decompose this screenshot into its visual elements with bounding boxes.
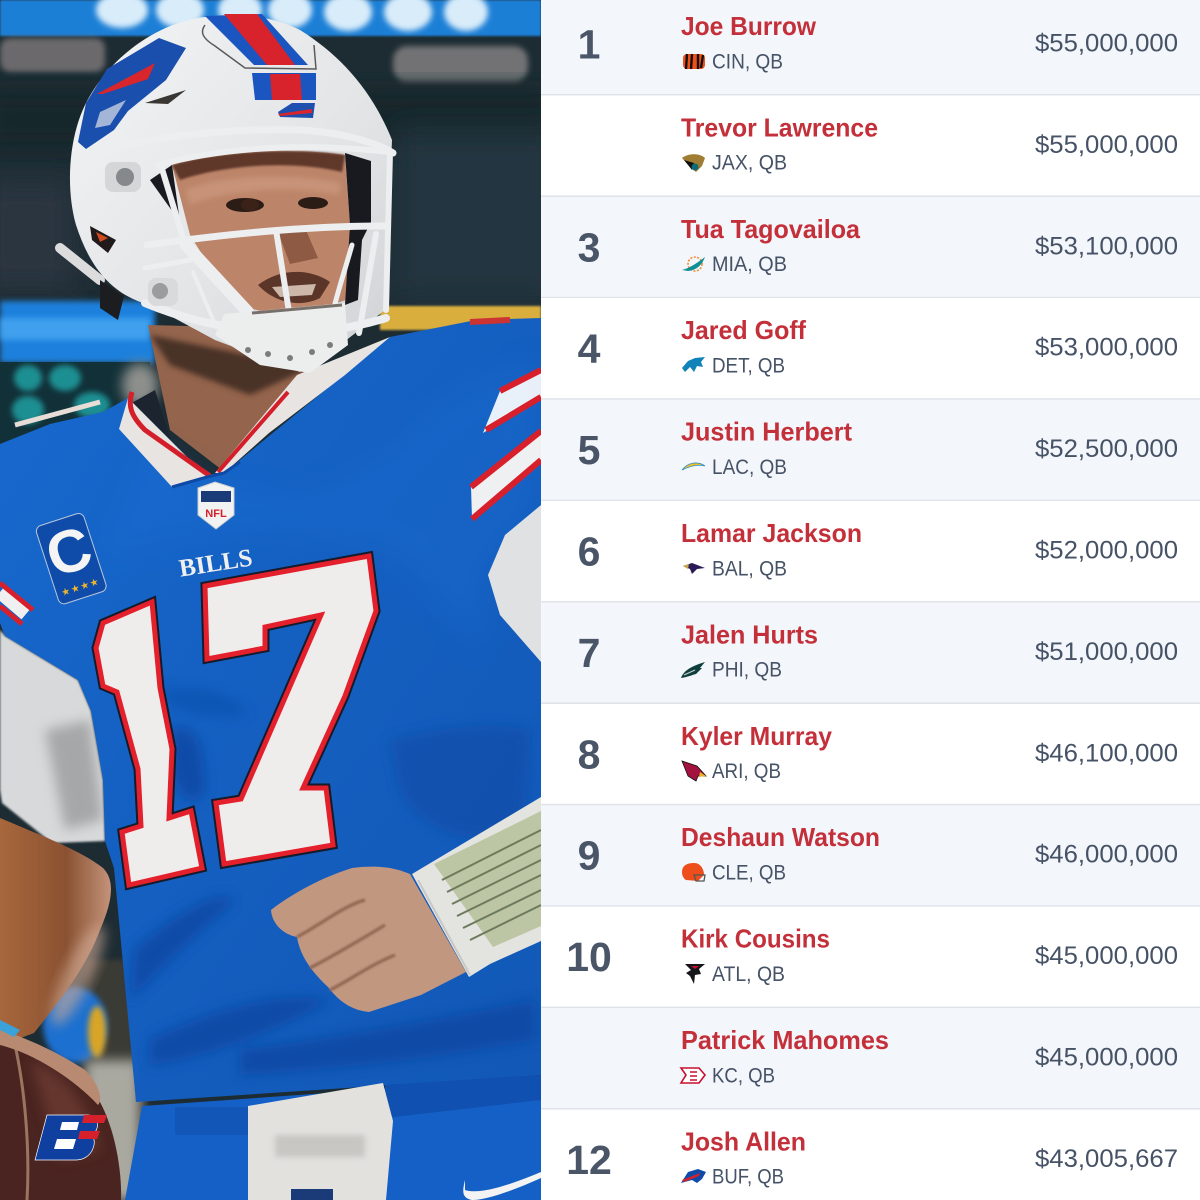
face (150, 151, 371, 318)
row 9: Deshaun Watson: 9 (578, 833, 600, 879)
stadium background (0, 0, 561, 1200)
icon: Lions (682, 357, 705, 372)
helmet clips and vents (60, 90, 186, 320)
pants (125, 1075, 541, 1200)
towel (248, 1083, 393, 1200)
icon: Bills (681, 1169, 706, 1183)
row 7: Jalen Hurts: 7 (578, 630, 600, 676)
icon: Dolphins (682, 257, 705, 271)
row 12: Josh Allen: $43,005,667 (1035, 1145, 1178, 1173)
row 10: Kirk Cousins: 10 (566, 934, 612, 980)
row 6: Lamar Jackson: 6 (578, 528, 600, 574)
row 10: Kirk Cousins (541, 907, 1200, 1008)
row 2: Trevor Lawrence: $55,000,000 (1035, 131, 1178, 159)
row 1: Joe Burrow: Joe Burrow (681, 11, 817, 41)
wrist band (412, 797, 541, 977)
row 6: Lamar Jackson: $52,000,000 (1035, 536, 1178, 564)
row 8: Kyler Murray: $46,100,000 (1035, 739, 1178, 767)
row 5: Justin Herbert: Justin Herbert (681, 417, 852, 447)
row 5: Justin Herbert: $52,500,000 (1035, 435, 1178, 463)
row 1: Joe Burrow: 1 (578, 22, 600, 68)
row 7: Jalen Hurts (541, 603, 1200, 704)
helmet bills logo (78, 38, 315, 149)
row 12: Josh Allen: 12 (566, 1137, 612, 1183)
row 6: Lamar Jackson (541, 501, 1200, 603)
row 3: Tua Tagovailoa: $53,100,000 (1035, 232, 1178, 260)
icon: Chargers (682, 463, 705, 470)
icon: Eagles (681, 662, 705, 678)
icon: Jaguars (682, 154, 705, 172)
row 5: Justin Herbert: 5 (578, 427, 600, 473)
row 2: Trevor Lawrence (541, 96, 1200, 197)
row 3: Tua Tagovailoa (541, 197, 1200, 298)
number 7 (205, 556, 376, 864)
icon: Ravens (683, 563, 705, 574)
row 11: Patrick Mahomes (541, 1008, 1200, 1110)
helmet stripes (202, 14, 316, 100)
row 7: Jalen Hurts: PHI, QB (712, 659, 782, 682)
row 8: Kyler Murray (541, 704, 1200, 805)
row 9: Deshaun Watson: Deshaun Watson (681, 822, 880, 852)
row 2: Trevor Lawrence: Trevor Lawrence (681, 112, 878, 142)
row 7: Jalen Hurts: Jalen Hurts (681, 619, 818, 649)
brand logo (35, 1115, 107, 1160)
left forearm (0, 818, 114, 1040)
row 10: Kirk Cousins: ATL, QB (712, 963, 785, 986)
NFL shield (198, 482, 234, 529)
row 9: Deshaun Watson: $46,000,000 (1035, 841, 1178, 869)
row 9: Deshaun Watson: CLE, QB (712, 862, 786, 885)
row 3: Tua Tagovailoa: 3 (578, 224, 600, 270)
facemask (100, 130, 393, 337)
chin strap and guard (215, 303, 348, 373)
left grey undersleeve (0, 630, 105, 843)
captain patch: C (38, 513, 100, 590)
row 4: Jared Goff: DET, QB (712, 355, 785, 378)
row 10: Kirk Cousins: Kirk Cousins (681, 924, 830, 954)
right undersleeve (488, 505, 541, 662)
row 4: Jared Goff (541, 298, 1200, 400)
row 12: Josh Allen: Josh Allen (681, 1126, 806, 1156)
row 10: Kirk Cousins: $45,000,000 (1035, 942, 1178, 970)
panel: salary ranking table (541, 0, 1200, 1189)
row 4: Jared Goff: 4 (578, 326, 601, 372)
number 1 (96, 602, 202, 885)
helmet (60, 14, 393, 373)
row 6: Lamar Jackson: BAL, QB (712, 557, 787, 580)
captain patch: ★★★★ (60, 576, 101, 599)
panel: player photo (0, 0, 541, 1200)
row 1: Joe Burrow: $55,000,000 (1035, 30, 1178, 58)
row 8: Kyler Murray: 8 (578, 731, 600, 777)
row 1: Joe Burrow: CIN, QB (712, 50, 783, 73)
hand (271, 867, 466, 1012)
row 4: Jared Goff: Jared Goff (681, 315, 806, 345)
row 11: Patrick Mahomes: KC, QB (712, 1064, 775, 1087)
sleeve stripes (0, 320, 541, 624)
blue jersey (0, 318, 541, 1102)
icon: Bengals (683, 54, 705, 69)
icon: Chiefs (681, 1068, 705, 1083)
row 8: Kyler Murray: Kyler Murray (681, 721, 833, 751)
NFL shield: NFL (205, 508, 227, 520)
row 3: Tua Tagovailoa: Tua Tagovailoa (681, 214, 861, 244)
row 11: Patrick Mahomes: Patrick Mahomes (681, 1025, 889, 1055)
row 8: Kyler Murray: ARI, QB (712, 760, 781, 783)
row 9: Deshaun Watson (541, 805, 1200, 907)
football and hand (0, 1020, 121, 1200)
icon: Cardinals (682, 761, 706, 781)
number 17 (96, 556, 376, 885)
row 1: Joe Burrow (541, 0, 1200, 96)
row 5: Justin Herbert: LAC, QB (712, 456, 787, 479)
neck (128, 325, 345, 470)
row 12: Josh Allen (541, 1110, 1200, 1200)
row 3: Tua Tagovailoa: MIA, QB (712, 253, 787, 276)
row 11: Patrick Mahomes: $45,000,000 (1035, 1044, 1178, 1072)
row 2: Trevor Lawrence: JAX, QB (712, 152, 787, 175)
row 7: Jalen Hurts: $51,000,000 (1035, 638, 1178, 666)
BILLS wordmark: BILLS (177, 544, 254, 583)
row 12: Josh Allen: BUF, QB (712, 1166, 784, 1189)
jersey collar (119, 337, 390, 487)
icon: Browns (682, 863, 705, 881)
icon: Falcons (685, 964, 705, 984)
row 4: Jared Goff: $53,000,000 (1035, 334, 1178, 362)
row 6: Lamar Jackson: Lamar Jackson (681, 518, 862, 548)
jersey folds (130, 687, 535, 1075)
row 5: Justin Herbert (541, 400, 1200, 501)
